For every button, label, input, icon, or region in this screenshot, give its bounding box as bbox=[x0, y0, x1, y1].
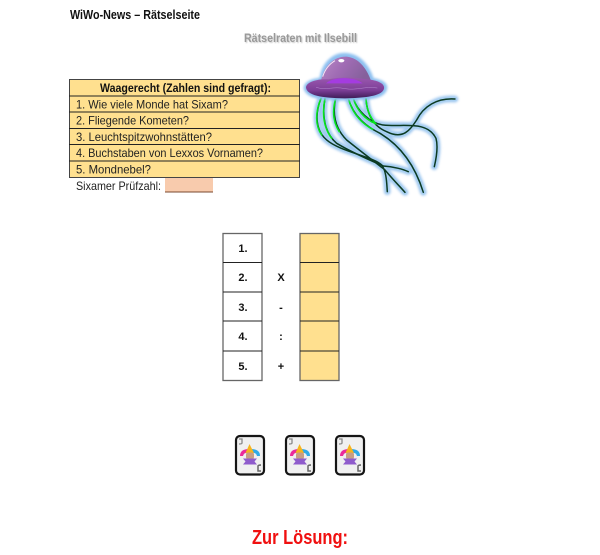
clue 5: 5. Mondnebel? bbox=[76, 162, 151, 176]
icon: jellyfish bbox=[306, 55, 455, 192]
page heading: WiWo-News – Rätselseite bbox=[70, 8, 200, 22]
check number field: Sixamer Prüfzahl: bbox=[76, 179, 161, 193]
left number column bbox=[223, 234, 262, 380]
icon: joker card 3 bbox=[336, 436, 364, 474]
left number column: 4. bbox=[238, 331, 248, 343]
operators: - bbox=[279, 302, 283, 314]
puzzle title: Rätselraten mit Ilsebill bbox=[245, 34, 358, 46]
panel: crossword clues table bbox=[69, 80, 300, 178]
jellyfish bell bbox=[306, 55, 385, 98]
icons: joker cards bbox=[236, 436, 364, 474]
operators: X bbox=[277, 272, 285, 284]
operators: + bbox=[278, 361, 284, 373]
clue 3: 3. Leuchtspitzwohnstätten? bbox=[76, 130, 212, 144]
left number column: 2. bbox=[238, 272, 248, 284]
check number field bbox=[76, 178, 213, 193]
icon: joker card 1 bbox=[236, 436, 264, 474]
operators: : bbox=[279, 331, 283, 343]
clue table heading: Waagerecht (Zahlen sind gefragt): bbox=[100, 81, 271, 95]
panel: number grid bbox=[223, 234, 339, 380]
solution link: Zur Lösung: bbox=[252, 527, 348, 549]
icon: joker card 2 bbox=[286, 436, 314, 474]
left number column: 3. bbox=[238, 302, 248, 314]
jellyfish tentacles bbox=[317, 98, 455, 192]
clue 1: 1. Wie viele Monde hat Sixam? bbox=[76, 98, 228, 112]
operators bbox=[277, 272, 285, 373]
puzzle title: Rätselraten mit Ilsebill bbox=[244, 33, 357, 45]
left number column: 5. bbox=[238, 361, 248, 373]
left number column: 1. bbox=[238, 243, 248, 255]
clue 2: 2. Fliegende Kometen? bbox=[76, 114, 189, 128]
right answer column bbox=[300, 234, 339, 380]
clue 4: 4. Buchstaben von Lexxos Vornamen? bbox=[76, 146, 263, 160]
